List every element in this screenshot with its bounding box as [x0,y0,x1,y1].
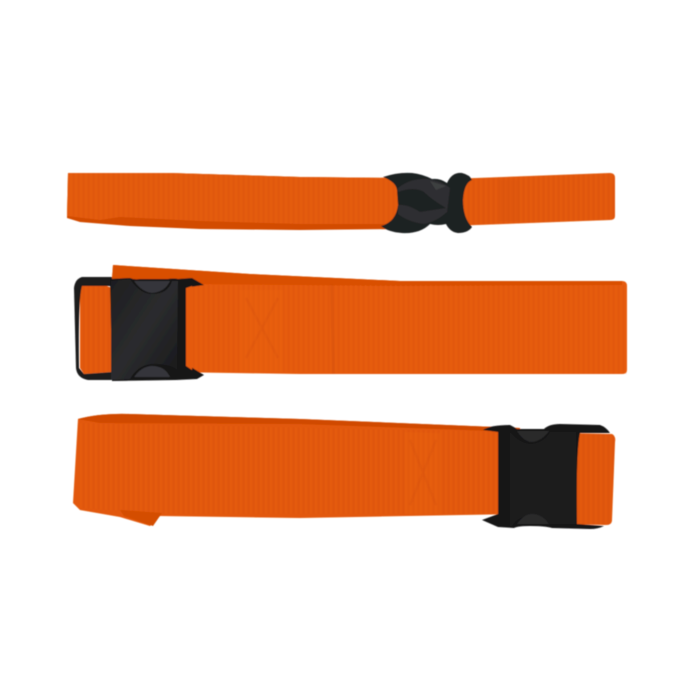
strap 2 stitching [240,290,283,372]
strap 1 stitching [498,180,520,221]
strap 3: bottom wide strap [73,414,615,529]
buckle 2: large buckle [74,277,204,381]
strap 1: top narrow strap [67,173,615,233]
strap 3 tail loop [560,433,615,525]
buckle 3: large buckle [482,424,610,529]
strap 3 tail [120,510,162,526]
strap 2 tail loop [80,285,112,374]
strap 3 stitching [405,432,440,514]
strap 2: middle wide strap [74,265,627,381]
buckle 1: small side-release buckle [381,173,472,233]
